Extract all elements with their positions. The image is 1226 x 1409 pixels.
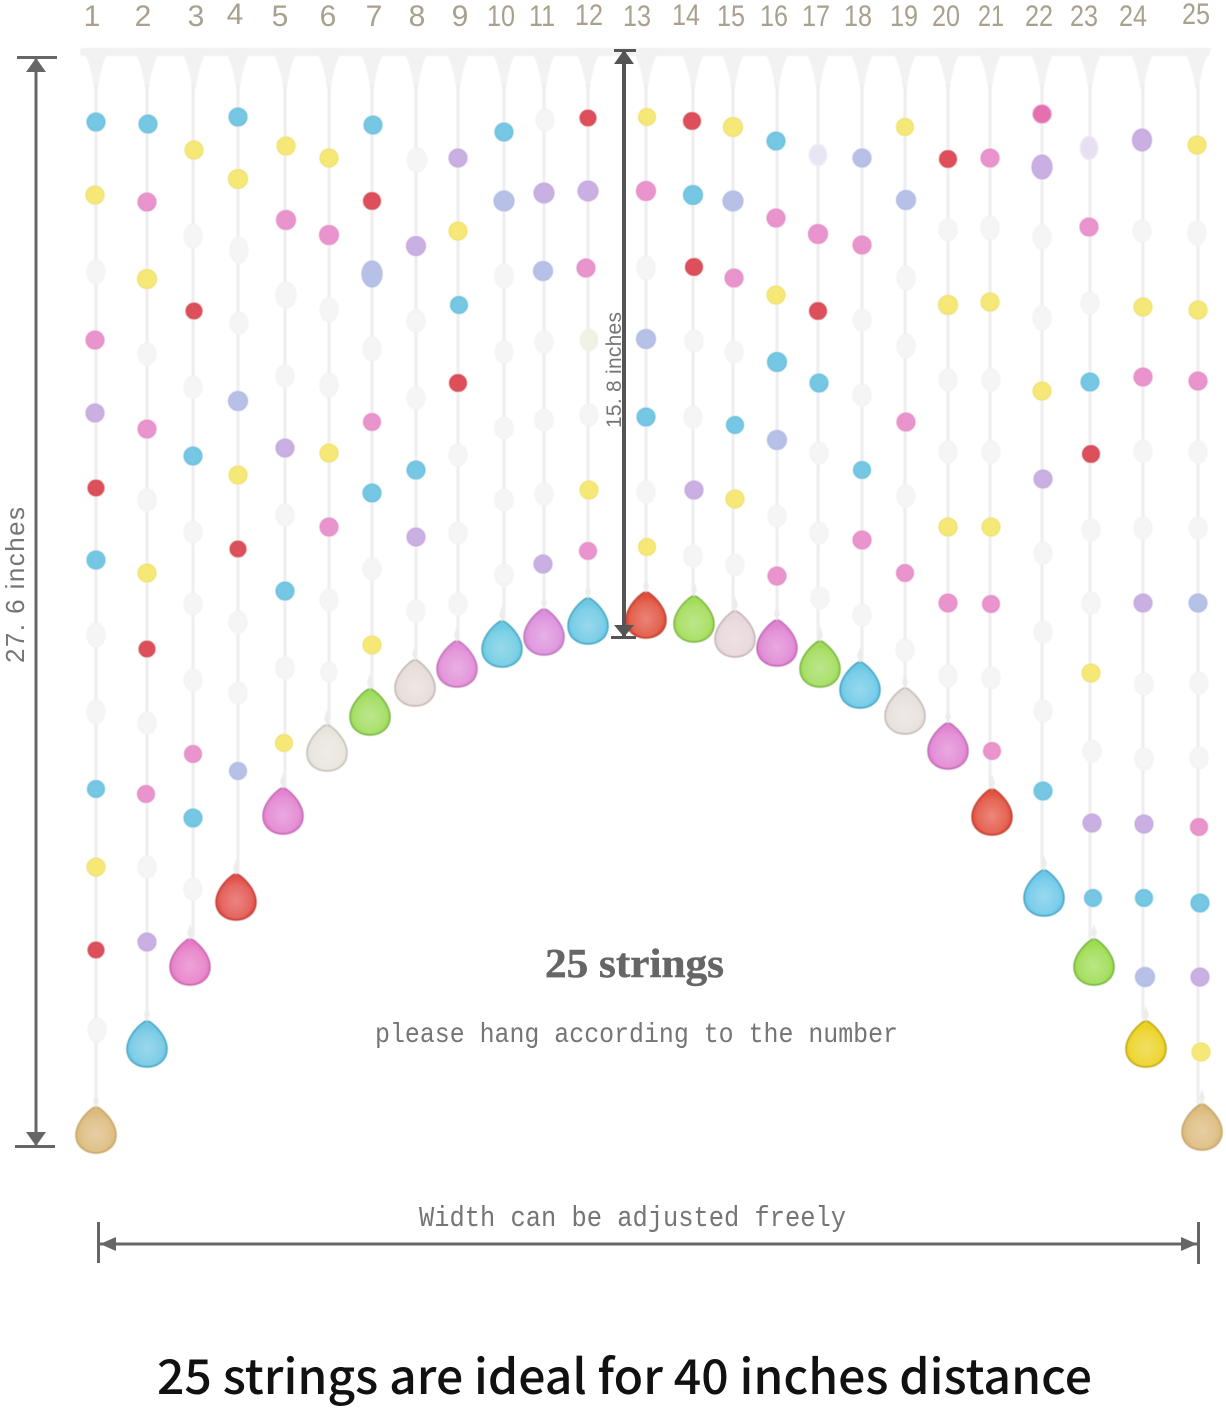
string 25 bbox=[1182, 84, 1222, 1150]
column numbers: 10 bbox=[487, 0, 515, 33]
column numbers: 11 bbox=[529, 0, 555, 33]
height arrow: 27.6 inches bbox=[15, 56, 57, 1148]
column numbers: 5 bbox=[272, 0, 288, 33]
column numbers: 9 bbox=[452, 0, 468, 33]
column numbers: 23 bbox=[1070, 0, 1098, 33]
string 8 bbox=[395, 84, 435, 706]
string 23 bbox=[1074, 84, 1114, 985]
column numbers: 21 bbox=[978, 0, 1004, 33]
string 3 bbox=[170, 84, 210, 985]
string 22 bbox=[1024, 84, 1064, 916]
column numbers: 24 bbox=[1119, 0, 1147, 33]
column numbers: 2 bbox=[135, 0, 151, 33]
string 16 bbox=[757, 84, 797, 666]
string 21 bbox=[972, 84, 1012, 835]
column numbers: 19 bbox=[890, 0, 918, 33]
string 15 bbox=[715, 84, 755, 657]
string 19 bbox=[885, 84, 925, 734]
note: hang by number: please hang according to the number bbox=[375, 1020, 898, 1051]
column numbers: 22 bbox=[1025, 0, 1053, 33]
string 2 bbox=[127, 84, 167, 1067]
string 9 bbox=[437, 84, 477, 687]
string 14 bbox=[674, 84, 714, 642]
label: 27.6 inches: 27. 6 inches bbox=[0, 507, 30, 663]
column numbers bbox=[84, 0, 1210, 33]
height arrow: 15.8 inches bbox=[611, 49, 636, 639]
string 5 bbox=[263, 84, 303, 834]
width arrow bbox=[97, 1222, 1200, 1264]
column numbers: 18 bbox=[844, 0, 872, 33]
column numbers: 15 bbox=[717, 0, 745, 33]
bead curtain bbox=[76, 84, 1222, 1153]
label: 15.8 inches: 15. 8 inches bbox=[603, 312, 626, 428]
column numbers: 17 bbox=[802, 0, 830, 33]
string 7 bbox=[350, 84, 390, 735]
column numbers: 16 bbox=[760, 0, 788, 33]
string 13 bbox=[626, 84, 666, 638]
string 6 bbox=[307, 84, 347, 771]
heading: 25 strings: 25 strings bbox=[545, 940, 724, 986]
string 20 bbox=[928, 84, 968, 769]
string 4 bbox=[216, 84, 256, 920]
string 10 bbox=[482, 84, 522, 667]
column numbers: 13 bbox=[623, 0, 651, 33]
column numbers: 7 bbox=[366, 0, 382, 33]
string 18 bbox=[840, 84, 880, 708]
column numbers: 20 bbox=[932, 0, 960, 33]
string 1 bbox=[76, 84, 116, 1153]
column numbers: 8 bbox=[409, 0, 425, 33]
column numbers: 6 bbox=[320, 0, 336, 33]
string 11 bbox=[524, 84, 564, 655]
string 12 bbox=[568, 84, 608, 644]
string 24 bbox=[1126, 84, 1166, 1067]
bottom caption: 25 strings are ideal for 40 inches distance bbox=[157, 1338, 1092, 1408]
column numbers: 1 bbox=[84, 0, 100, 33]
column numbers: 3 bbox=[188, 0, 204, 33]
top hanging bar bbox=[80, 48, 1212, 88]
note: adjustable width: Width can be adjusted freely bbox=[419, 1202, 846, 1235]
string 17 bbox=[800, 84, 840, 687]
